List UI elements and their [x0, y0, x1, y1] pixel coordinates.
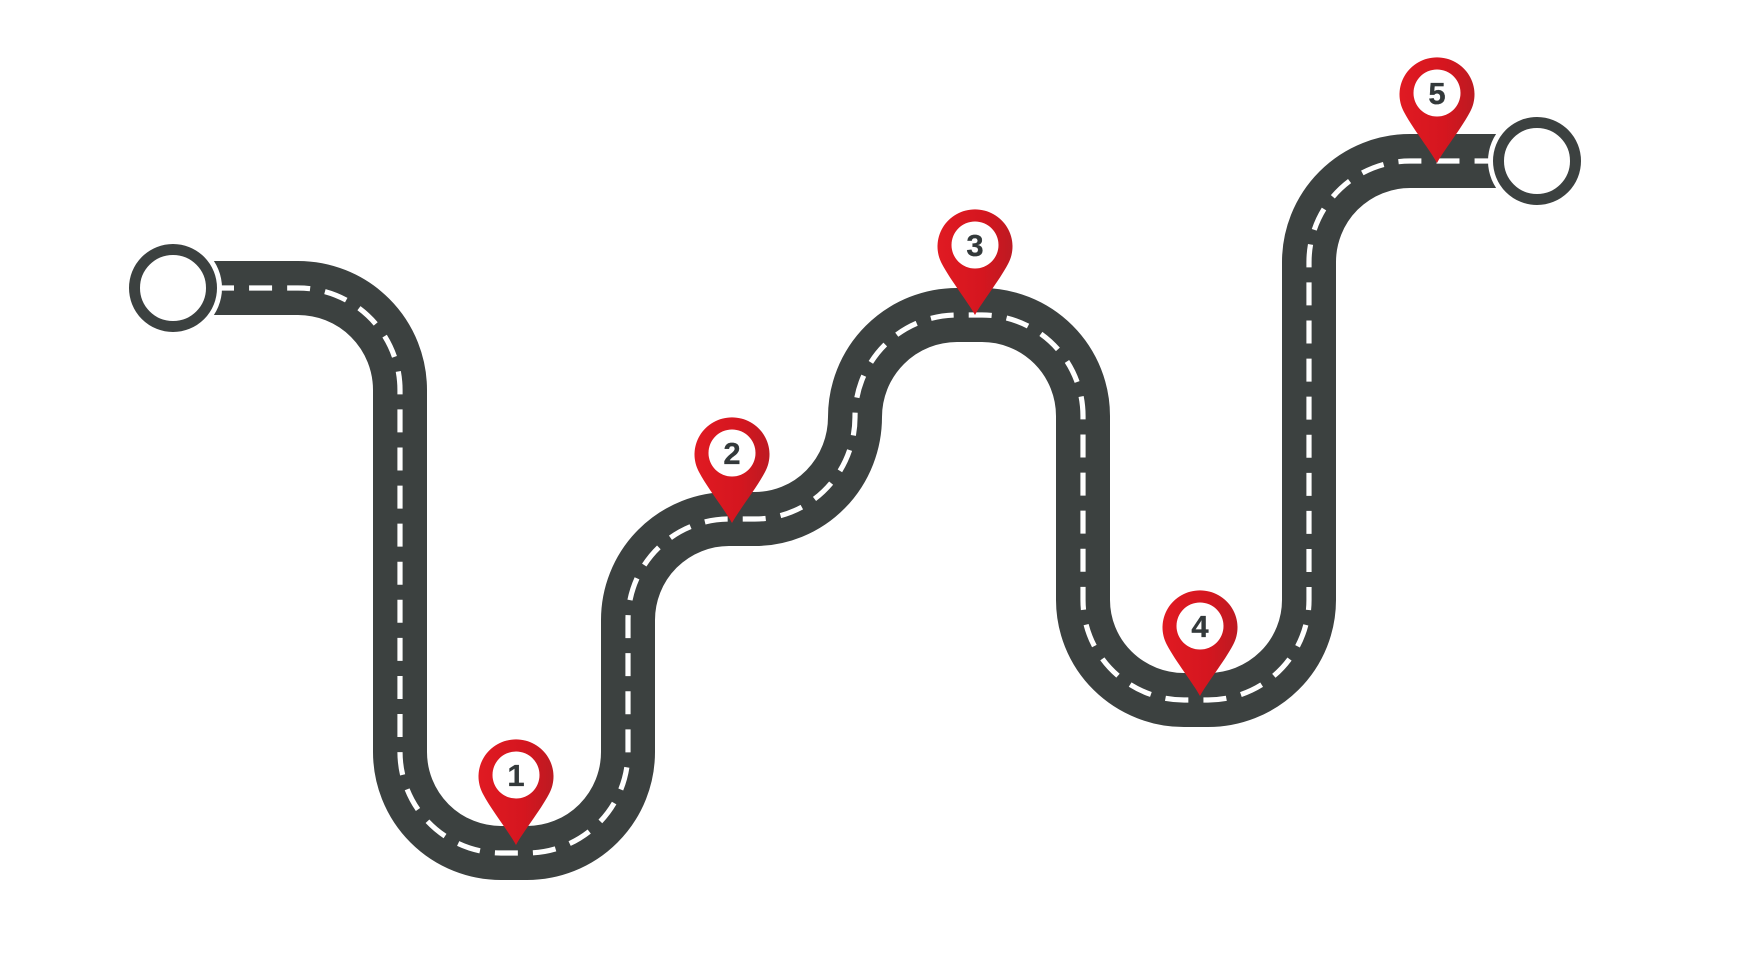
pin 1: [478, 739, 554, 845]
pin 5: [1400, 57, 1474, 163]
winding road: [211, 161, 1500, 853]
pin 2: [694, 417, 770, 523]
pin 3: [938, 209, 1012, 315]
pin 3: 3: [966, 228, 984, 263]
start circle: [124, 239, 222, 337]
pin 4: 4: [1191, 609, 1209, 644]
end circle: [1488, 112, 1586, 210]
pin 1: 1: [507, 758, 525, 793]
road centre dashes: [211, 161, 1500, 853]
pin 4: [1162, 590, 1238, 696]
pin 2: 2: [723, 436, 741, 471]
pin 5: 5: [1428, 76, 1446, 111]
road surface: [213, 161, 1500, 853]
